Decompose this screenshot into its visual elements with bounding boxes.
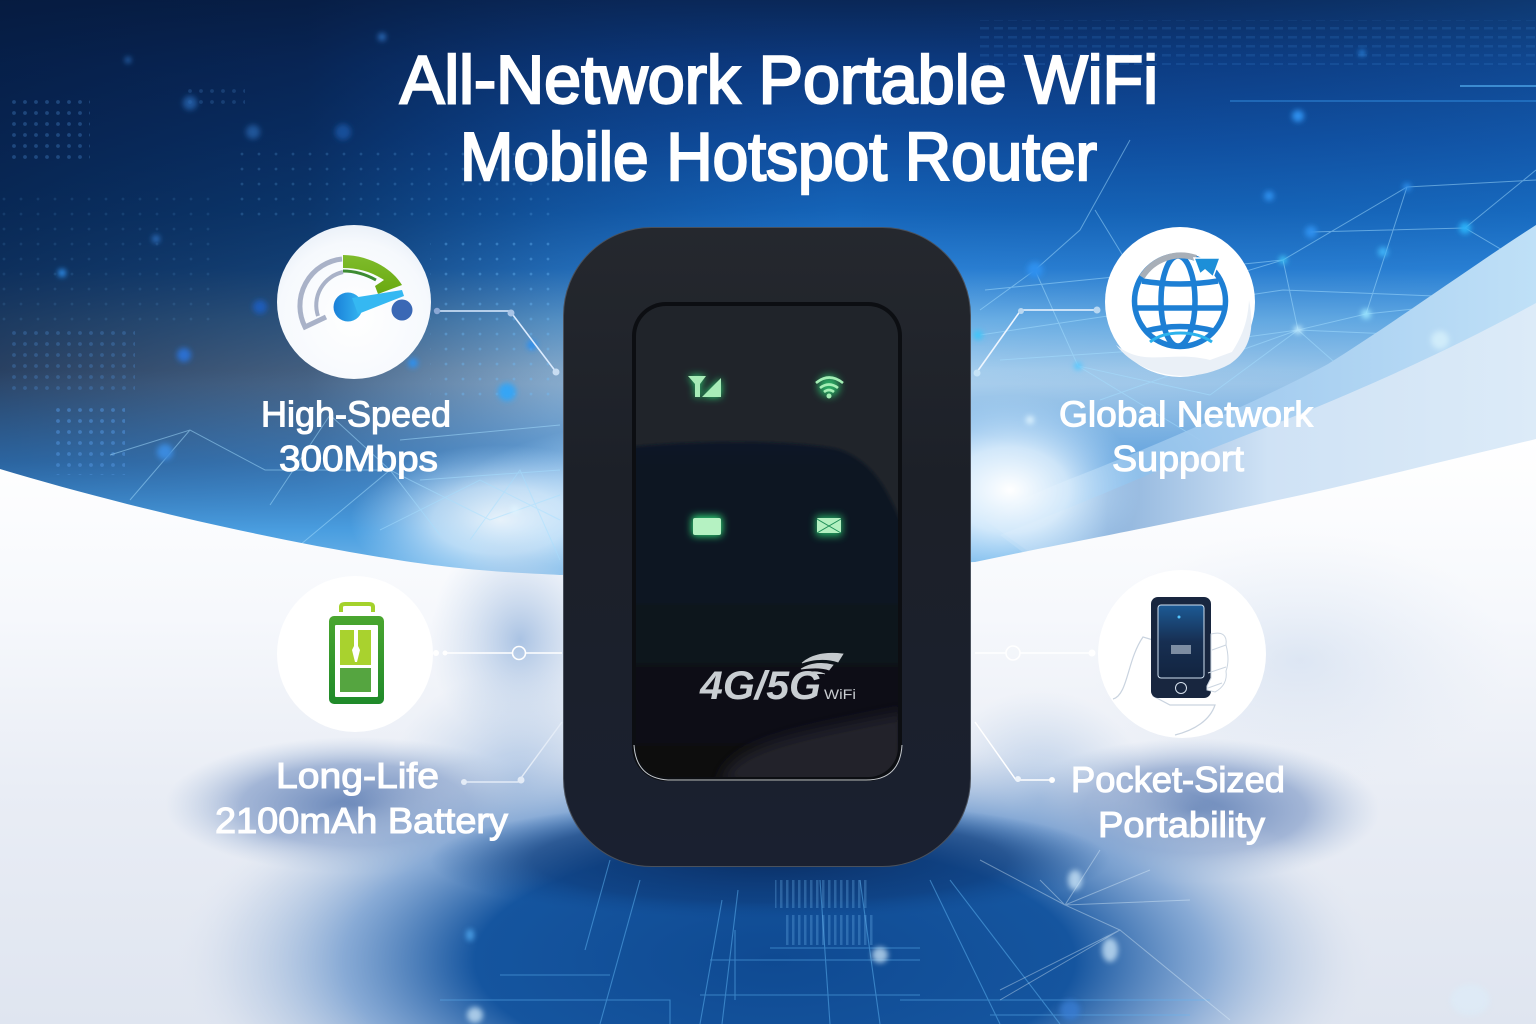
label: pocket-sized: [1071, 759, 1285, 845]
bright network at lower right: [980, 850, 1230, 1020]
connector: pocket-sized: [975, 722, 1055, 783]
LED: message left: [692, 516, 722, 536]
white wave: [0, 439, 1536, 1024]
title: Mobile Hotspot Router: [460, 119, 1097, 195]
circuit comb blocks: [775, 880, 875, 945]
icon: speedometer: [277, 225, 431, 379]
network lines: [110, 140, 1536, 560]
bottom light spots: [466, 870, 1490, 1023]
label: battery: [215, 755, 508, 841]
label: global network: [1059, 394, 1314, 479]
bottom blue floor: [175, 730, 1375, 1024]
second right wave band: [1000, 303, 1536, 560]
logo: 4G/5G WiFi: [699, 653, 856, 708]
icon: phone in hand: [1098, 570, 1266, 738]
circuit pattern at the bottom: [440, 860, 1210, 1024]
label: high-speed: [261, 394, 451, 479]
LED: message right: [816, 516, 842, 536]
connector: battery: [433, 646, 562, 660]
connector: high-speed: [434, 308, 560, 376]
LED: wifi: [816, 375, 843, 398]
label: battery: Long-Life: [276, 755, 439, 796]
router device: [564, 228, 970, 866]
label: pocket-sized: Portability: [1098, 804, 1265, 845]
title: All-Network Portable WiFi: [400, 42, 1158, 118]
label: high-speed: High-Speed: [261, 394, 451, 434]
icon: globe: [1105, 227, 1255, 377]
router screen: [630, 302, 905, 790]
logo: 4G/5G WiFi: 4G/5G: [699, 664, 821, 708]
logo: 4G/5G WiFi: WiFi: [824, 686, 856, 702]
label: pocket-sized: Pocket-Sized: [1071, 759, 1285, 800]
LED: signal: [688, 376, 721, 397]
background: [0, 0, 1536, 640]
glowing particles: [58, 33, 1471, 514]
label: high-speed: 300Mbps: [279, 438, 438, 479]
upper right wave band: [985, 225, 1536, 560]
label: global network: Support: [1112, 438, 1244, 479]
label: battery: 2100mAh Battery: [215, 800, 508, 841]
title: [400, 42, 1158, 195]
label: global network: Global Network: [1059, 394, 1314, 434]
glow right of device: [880, 395, 1140, 585]
icon: battery: [277, 576, 433, 732]
side haze and label patches: [165, 530, 1510, 910]
connector: long-life: [461, 722, 562, 785]
connector: portability upper: [975, 646, 1096, 660]
connector: global network: [974, 306, 1100, 376]
